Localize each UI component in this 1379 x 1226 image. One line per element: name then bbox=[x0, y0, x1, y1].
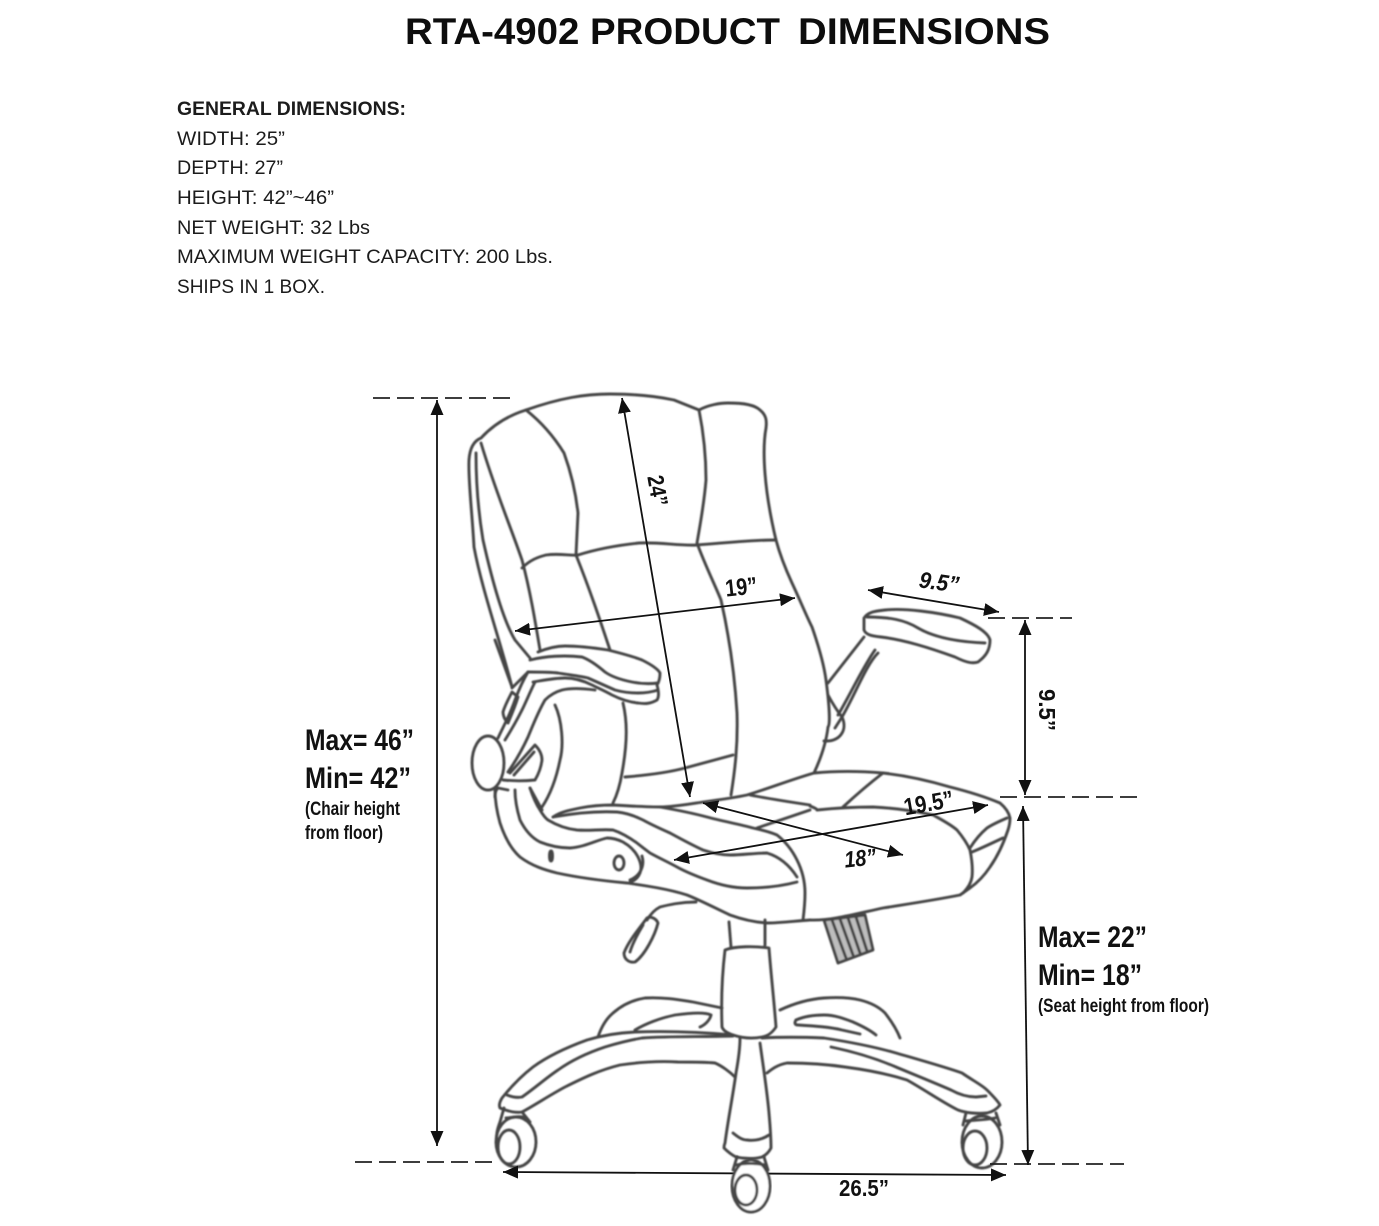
text block: general dimensions bbox=[177, 99, 553, 298]
dimension label: 18: 18” bbox=[843, 843, 878, 873]
left armrest bbox=[472, 640, 660, 797]
text block: general dimensions: WIDTH: 25” bbox=[177, 129, 285, 150]
title bbox=[405, 11, 1050, 52]
front base legs bbox=[499, 1032, 1000, 1158]
gas lift column bbox=[722, 920, 776, 1038]
height lever bbox=[624, 902, 696, 962]
dimension label: 9.5 armrest: 9.5” bbox=[917, 566, 961, 598]
arrow: back height 24 bbox=[622, 398, 690, 797]
title: DIMENSIONS bbox=[798, 11, 1050, 52]
callout: seat height: (Seat height from floor) bbox=[1038, 996, 1209, 1017]
arrow: armrest length bbox=[868, 590, 999, 612]
arrow: armrest height bbox=[1024, 620, 1026, 795]
callout: chair height: Max= 46” bbox=[305, 724, 414, 757]
center caster, drawn over the base width arrow bbox=[732, 1157, 770, 1212]
arrow: seat depth 18 bbox=[703, 803, 903, 855]
text block: general dimensions: HEIGHT: 42”~46” bbox=[177, 188, 334, 209]
seat cushion bbox=[495, 772, 1010, 923]
arrow: back width 19 bbox=[515, 598, 795, 631]
dimension label: 24: 24” bbox=[642, 473, 673, 508]
arrow: seat height bbox=[1023, 806, 1028, 1165]
chair backrest bbox=[469, 394, 829, 807]
callout: chair height: from floor) bbox=[305, 823, 383, 844]
arrow: base width 26.5 bbox=[503, 1172, 1006, 1175]
arrow: overall height bbox=[436, 400, 438, 1146]
dimension label: 19: 19” bbox=[724, 572, 759, 603]
callout: chair height: Min= 42” bbox=[305, 762, 411, 795]
text block: general dimensions: DEPTH: 27” bbox=[177, 158, 283, 179]
callout: chair height bbox=[305, 724, 414, 844]
side casters bbox=[496, 1108, 1002, 1168]
text block: general dimensions: NET WEIGHT: 32 Lbs bbox=[177, 218, 370, 239]
callout: seat height: Max= 22” bbox=[1038, 921, 1147, 954]
callout: seat height: Min= 18” bbox=[1038, 959, 1142, 992]
callout: seat height bbox=[1038, 921, 1209, 1017]
right armrest bbox=[824, 609, 990, 741]
callout: chair height: (Chair height bbox=[305, 799, 401, 820]
seat side pivot bbox=[630, 856, 643, 880]
text block: general dimensions: SHIPS IN 1 BOX. bbox=[177, 277, 325, 298]
dimension label: 9.5 height: 9.5” bbox=[1034, 689, 1060, 731]
rear base legs bbox=[598, 998, 900, 1038]
chair line drawing bbox=[469, 394, 1010, 1168]
text block: general dimensions: GENERAL DIMENSIONS: bbox=[177, 99, 406, 120]
title: RTA-4902 PRODUCT bbox=[405, 11, 780, 52]
arrow: seat width 19.5 bbox=[674, 805, 988, 860]
text block: general dimensions: MAXIMUM WEIGHT CAPACITY: 200 Lbs. bbox=[177, 247, 553, 268]
dimension label: 26.5: 26.5” bbox=[839, 1175, 889, 1201]
dimension label: 19.5: 19.5” bbox=[902, 786, 956, 821]
tension knob bbox=[824, 915, 873, 963]
dashed reference lines bbox=[355, 398, 1140, 1164]
